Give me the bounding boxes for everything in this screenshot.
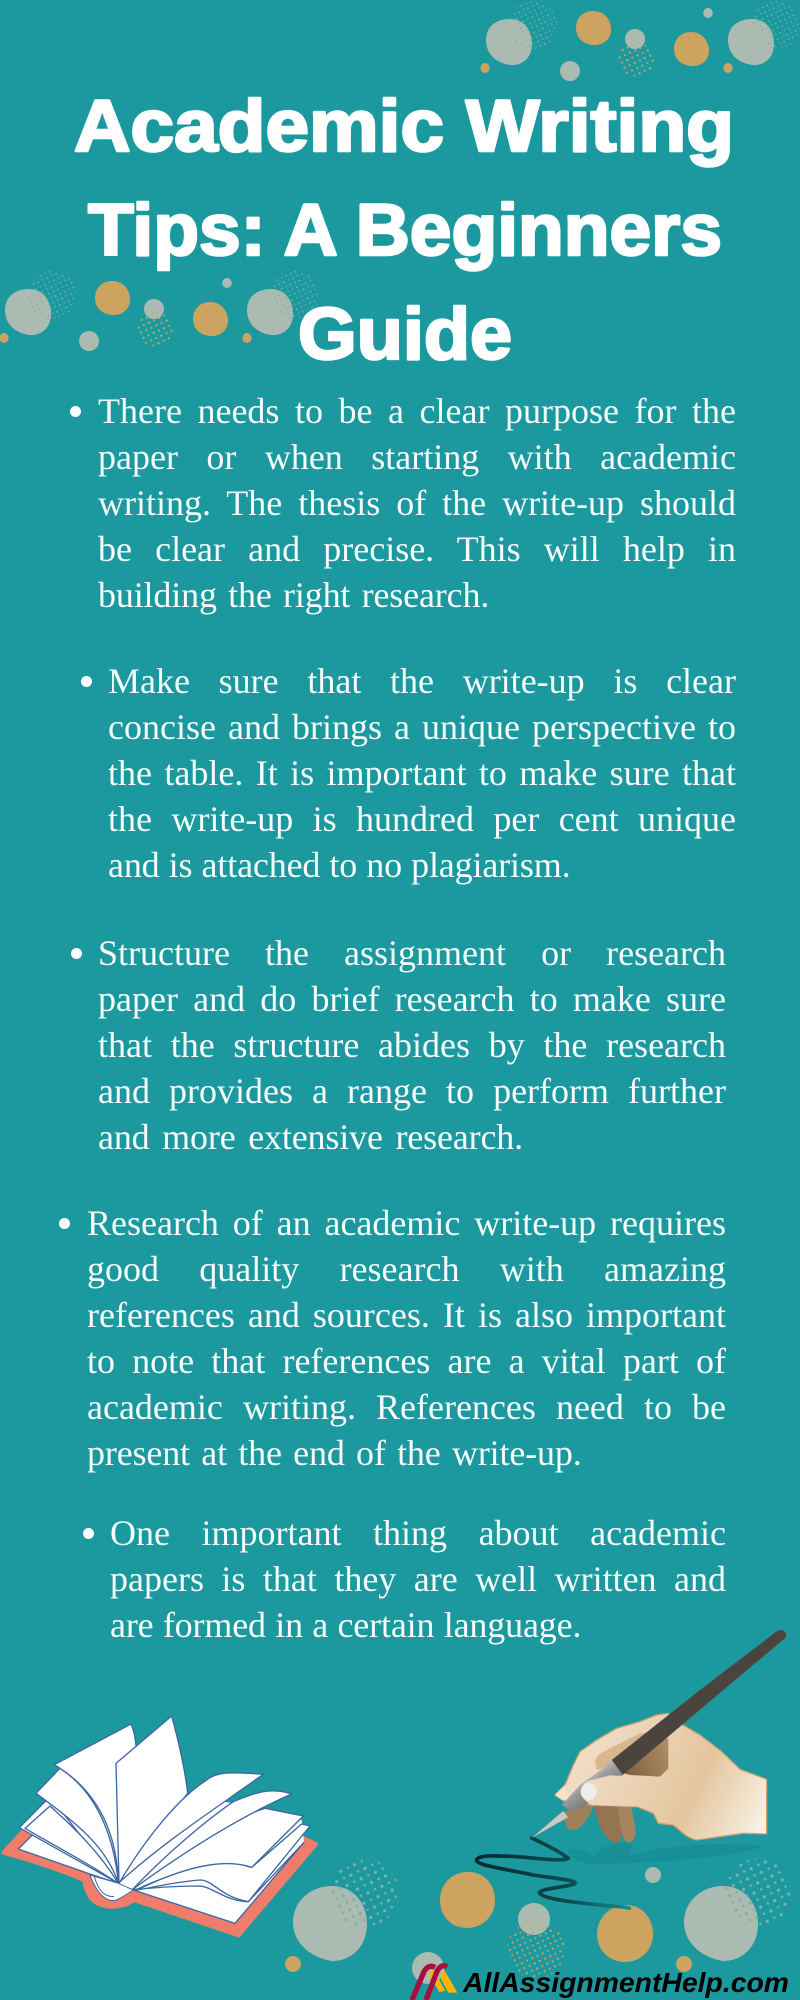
hand shadow (567, 1843, 765, 1865)
bullet text 1: building the right research. (98, 575, 489, 615)
decoration: blobs right of book (285, 1859, 399, 1972)
pen nib (531, 1811, 568, 1839)
decoration: left blobs beside title (0, 271, 319, 351)
pen barrel (612, 1630, 786, 1775)
white page underlay (18, 1767, 304, 1923)
title: Tips: A Beginners (88, 190, 722, 271)
bullet text 3: paper and do brief research to make sure (98, 979, 726, 1019)
bullet text 3 (71, 933, 726, 1157)
book cover (3, 1831, 316, 1935)
title (74, 86, 734, 375)
bullet text 1: be clear and precise. This will help in (98, 529, 736, 569)
bullet text 3: Structure the assignment or research (98, 933, 726, 973)
logo mark (412, 1966, 457, 2000)
bullet text 2: the table. It is important to make sure that (108, 753, 736, 793)
icon: hand holding pen (477, 1630, 786, 1908)
palm (555, 1713, 767, 1840)
bullet text 2 (81, 661, 736, 885)
bullet text 3: and more extensive research. (98, 1117, 523, 1157)
thumb nail (581, 1783, 597, 1800)
bullet text 2: Make sure that the write-up is clear (108, 661, 736, 701)
ink squiggle (477, 1838, 629, 1908)
bullet text 2: the write-up is hundred per cent unique (108, 799, 736, 839)
thumb (582, 1775, 663, 1807)
decoration: blobs under the hand (412, 1859, 792, 1984)
bullet text 3: that the structure abides by the research (98, 1025, 726, 1065)
icon: open book (3, 1716, 316, 1935)
bullet text 5: are formed in a certain language. (110, 1605, 581, 1645)
bullet text 4: academic writing. References need to be (87, 1387, 726, 1427)
bullet text 5: papers is that they are well written and (110, 1559, 726, 1599)
bullet text 1: There needs to be a clear purpose for the (98, 391, 736, 431)
upper finger shading (595, 1732, 657, 1770)
decoration: top right blobs (480, 1, 800, 81)
bullet text 4 (59, 1203, 726, 1473)
bullet text 4: Research of an academic write-up requires (87, 1203, 726, 1243)
lower fingers (564, 1800, 597, 1830)
bullet text 4: present at the end of the write-up. (87, 1433, 582, 1473)
bullet text 1: writing. The thesis of the write-up should (98, 483, 736, 523)
bullet text 5 (83, 1513, 726, 1645)
bullet text 5: One important thing about academic (110, 1513, 726, 1553)
bullet text 1 (70, 391, 736, 615)
index finger tip (555, 1785, 568, 1801)
palm shade under pen (618, 1738, 668, 1777)
bullet text 4: to note that references are a vital part of (87, 1341, 726, 1381)
bullet text 1: paper or when starting with academic (98, 437, 736, 477)
bullet text 2: and is attached to no plagiarism. (108, 845, 570, 885)
bullet text 2: concise and brings a unique perspective to (108, 707, 736, 747)
bullet text 4: good quality research with amazing (87, 1249, 726, 1289)
bullet text 3: and provides a range to perform further (98, 1071, 726, 1111)
title: Academic Writing (74, 86, 734, 167)
bullet text 4: references and sources. It is also important (87, 1295, 726, 1335)
logo text: AllAssignmentHelp.com (462, 1967, 789, 1998)
pen ferrule (562, 1760, 623, 1812)
title: Guide (298, 294, 512, 375)
